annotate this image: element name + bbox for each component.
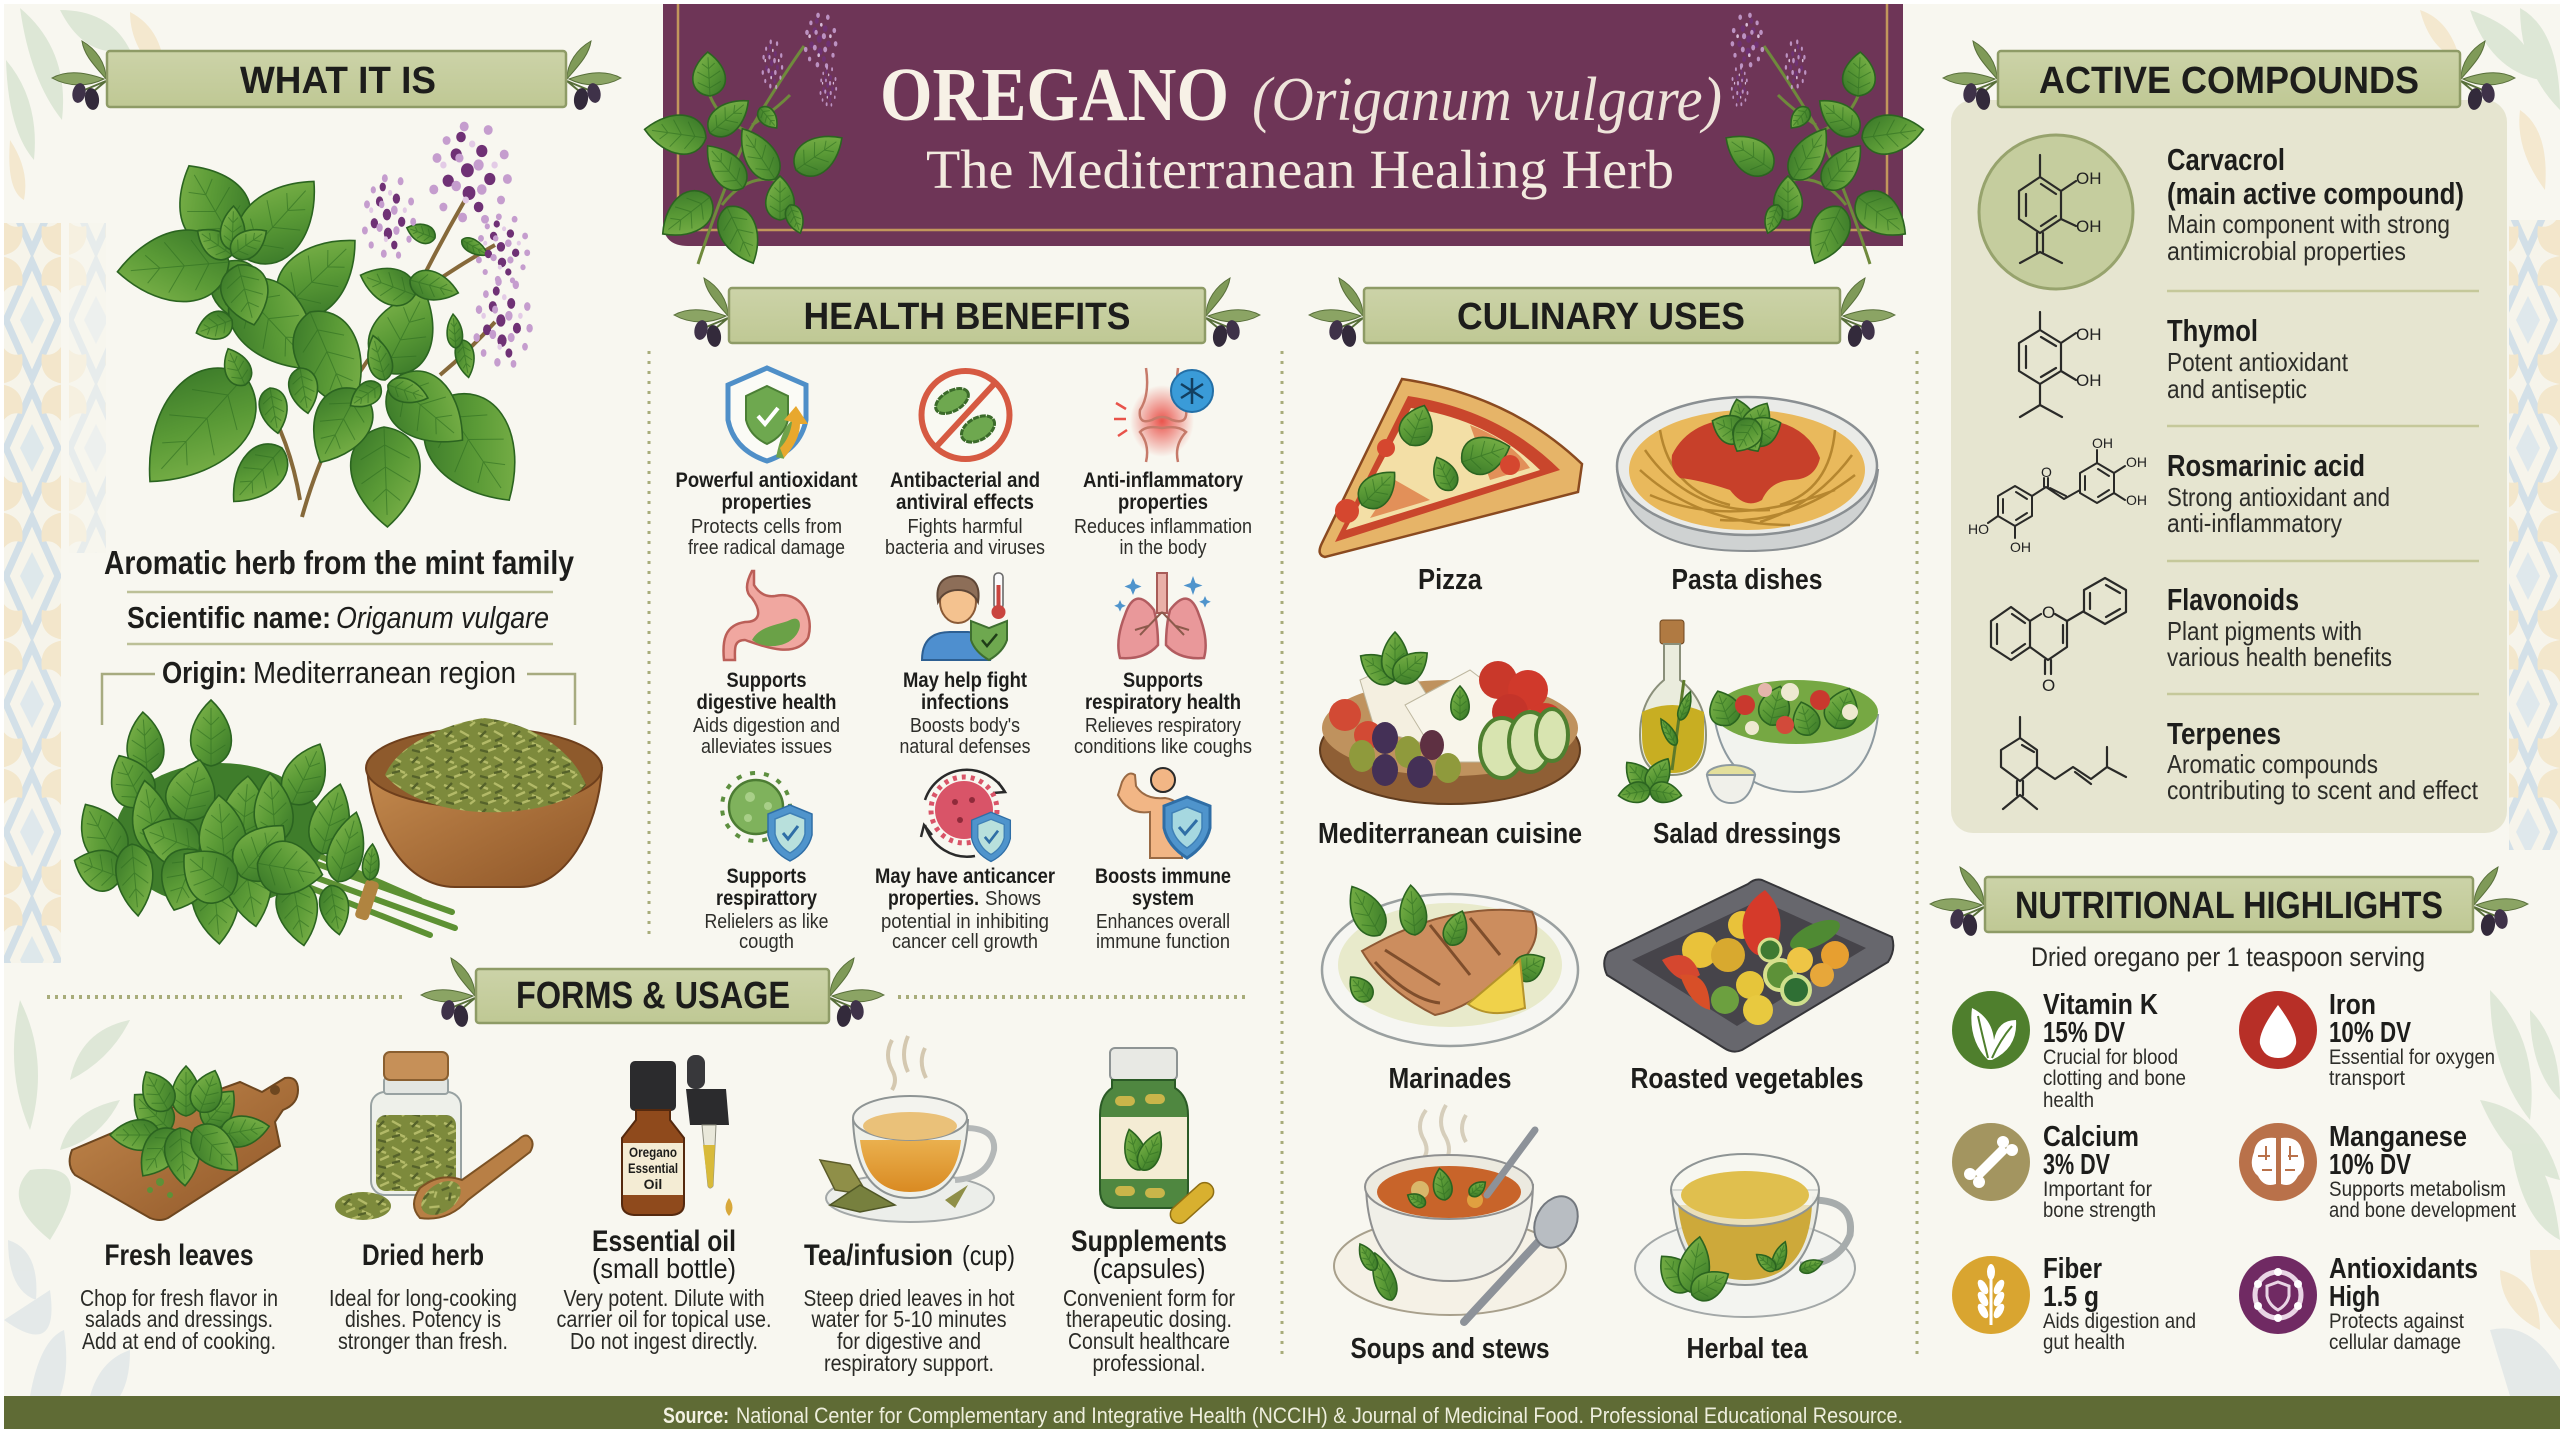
form: dried herb: Dried herb (362, 1239, 484, 1272)
benefit: supports respiratory: respirattory (716, 887, 817, 910)
benefit: anticancer (875, 770, 1055, 953)
molecule: rosmarinic acid: O (2041, 464, 2052, 480)
form: essential oil: carrier oil for topical use. (556, 1306, 772, 1332)
heading banner: forms and usage (421, 958, 884, 1028)
heading banner: health benefits (674, 278, 1260, 348)
illustration: fresh oregano bunch (67, 700, 455, 949)
form: essential oil (556, 1055, 772, 1354)
nutrient: iron (2239, 989, 2495, 1090)
benefit: respiratory health: respiratory health (1085, 691, 1241, 714)
illustration: pizza (1320, 379, 1582, 557)
molecule: carvacrol: OH (2076, 169, 2102, 188)
compound: flavonoids (1991, 578, 2392, 695)
benefit: digestive: Supports (726, 669, 806, 692)
illustration: oregano plant (114, 122, 544, 528)
molecule: rosmarinic acid (1968, 435, 2147, 555)
benefit: antioxidant: free radical damage (688, 537, 845, 559)
molecule: rosmarinic acid: OH (2126, 492, 2147, 508)
nutrient: antioxidants (2239, 1253, 2478, 1354)
background: right tile and foliage decoration (2420, 8, 2560, 1396)
nutrient: iron: transport (2329, 1067, 2405, 1090)
icon: cancer cell with shield (921, 770, 1010, 862)
benefit: anticancer: potential in inhibiting (881, 911, 1049, 933)
form: tea infusion: (cup) (962, 1240, 1015, 1271)
label: soups and stews: Soups and stews (1350, 1333, 1550, 1365)
heading banner: nutritional highlights (1930, 867, 2528, 937)
icon: brain (2239, 1123, 2317, 1201)
illustration: oil bottle and salad (1617, 620, 1878, 806)
icon: virus with shield (722, 773, 812, 861)
form: fresh leaves (70, 1064, 298, 1354)
benefit: anti-inflammatory: Anti-inflammatory (1083, 469, 1243, 492)
form: essential oil: Essential oil (592, 1225, 736, 1258)
form: fresh leaves: Add at end of cooking. (82, 1328, 276, 1354)
benefit: infections: Boosts body's (910, 715, 1020, 737)
icon: strong figure with shield (1118, 768, 1210, 858)
benefit: antibacterial: Fights harmful (908, 516, 1022, 538)
nutrient: vitamin K: Crucial for blood (2043, 1046, 2178, 1069)
nutrient: vitamin K: clotting and bone (2043, 1067, 2186, 1090)
benefit: anti-inflammatory (1074, 368, 1252, 559)
text: scientific name: Scientific name: (127, 600, 331, 635)
compound: carvacrol: (main active compound) (2167, 176, 2464, 211)
form: dried herb (329, 1052, 533, 1354)
nutrient: antioxidants: Protects against (2329, 1310, 2464, 1333)
nutrient: fiber (1952, 1253, 2196, 1354)
molecule: rosmarinic acid: HO (1968, 521, 1989, 537)
form: supplements: Consult healthcare (1068, 1328, 1230, 1354)
molecule: thymol: OH (2076, 371, 2102, 390)
panel background (1951, 100, 2507, 833)
benefit: anti-inflammatory: in the body (1120, 537, 1206, 559)
text: origin (102, 655, 575, 725)
icon: no bacteria (922, 371, 1010, 459)
heading banner: culinary uses: CULINARY USES (1457, 296, 1745, 338)
compound: thymol: Potent antioxidant (2167, 347, 2349, 377)
compound: carvacrol: Carvacrol (2167, 142, 2285, 177)
icon: blood drop (2239, 991, 2317, 1069)
benefit: anticancer: May have anticancer (875, 865, 1055, 888)
text: serving note: Dried oregano per 1 teaspoon serving (2031, 942, 2425, 972)
molecule: flavonoid: O (2042, 603, 2055, 622)
form: essential oil: Do not ingest directly. (570, 1328, 758, 1354)
nutrient: manganese: 10% DV (2329, 1149, 2412, 1181)
section: forms and usage (47, 958, 1249, 1376)
molecule: carvacrol: OH (2076, 217, 2102, 236)
benefit: antioxidant: Protects cells from (691, 516, 842, 538)
icon: stomach (723, 571, 810, 660)
illustration: oil bottle and dropper: Oregano (629, 1144, 677, 1160)
icon: sick person (922, 573, 1007, 660)
form: tea infusion (804, 1036, 1015, 1376)
text: origin: Origin: (162, 655, 247, 690)
nutrient: vitamin K: Vitamin K (2043, 989, 2158, 1021)
icon: wheat (1952, 1256, 2030, 1334)
compound: flavonoids: Flavonoids (2167, 582, 2299, 617)
form: fresh leaves: Fresh leaves (104, 1239, 254, 1272)
compound: flavonoids: Plant pigments with (2167, 616, 2362, 646)
compound: thymol: Thymol (2167, 313, 2258, 348)
compound: thymol: and antiseptic (2167, 374, 2307, 404)
text: origin: Mediterranean region (253, 655, 516, 690)
heading banner: what it is (52, 41, 621, 111)
form: tea infusion: Tea/infusion (804, 1239, 953, 1272)
nutrient: calcium: Important for (2043, 1178, 2152, 1201)
icon: bone (1952, 1123, 2030, 1201)
section: active compounds (1943, 41, 2515, 833)
benefit: digestive: Aids digestion and (693, 715, 840, 737)
illustration: marinated fish plate (1322, 879, 1578, 1046)
nutrient: manganese: and bone development (2329, 1199, 2516, 1222)
footer: source bar: National Center for Complementary and Integrative Health (NCCIH) & Journal of Medicinal Food. Professional Educational Resource. (736, 1403, 1903, 1428)
nutrient: antioxidants: Antioxidants (2329, 1253, 2478, 1285)
illustration: cutting board with leaves (70, 1064, 298, 1220)
nutrient: calcium: 3% DV (2043, 1149, 2110, 1181)
benefit: antioxidant: Powerful antioxidant (676, 469, 858, 492)
illustration: roasted vegetables tray (1604, 880, 1893, 1052)
compound: terpenes (2001, 716, 2479, 809)
footer: source bar (4, 1396, 2560, 1429)
label: salad dressings: Salad dressings (1653, 818, 1841, 850)
heading banner: forms and usage: FORMS & USAGE (516, 975, 790, 1017)
label: marinades: Marinades (1388, 1063, 1512, 1095)
form: supplements (1063, 1048, 1235, 1376)
benefit: immune: Boosts immune (1095, 865, 1231, 888)
benefit: infections: infections (921, 691, 1009, 714)
heading banner: nutritional highlights: NUTRITIONAL HIGHLIGHTS (2015, 885, 2443, 927)
heading banner: health benefits: HEALTH BENEFITS (804, 296, 1130, 338)
form: essential oil: (small bottle) (592, 1253, 736, 1284)
label: roasted vegetables: Roasted vegetables (1630, 1063, 1864, 1095)
label: mediterranean cuisine: Mediterranean cuisine (1318, 818, 1582, 850)
form: dried herb: dishes. Potency is (345, 1306, 501, 1332)
molecule: flavonoid: O (2042, 676, 2055, 695)
form: supplements: Supplements (1071, 1225, 1227, 1258)
nutrient: manganese (2239, 1121, 2516, 1222)
nutrient: calcium: Calcium (2043, 1121, 2139, 1153)
nutrient: iron: Iron (2329, 989, 2376, 1021)
nutrient: manganese: Manganese (2329, 1121, 2467, 1153)
title: Oregano: OREGANO (880, 53, 1229, 137)
benefit: immune: immune function (1096, 931, 1230, 953)
heading banner: culinary uses (1309, 278, 1895, 348)
benefit: respiratory health (1074, 573, 1252, 758)
nutrient: antioxidants: cellular damage (2329, 1331, 2461, 1354)
icon: lungs (1114, 573, 1211, 658)
molecule: thymol (2019, 312, 2102, 417)
form: supplements: professional. (1092, 1350, 1206, 1376)
illustration: dried oregano in wooden bowl (366, 718, 602, 887)
compound: rosmarinic acid: Rosmarinic acid (2167, 448, 2365, 483)
nutrient: fiber: Aids digestion and (2043, 1310, 2196, 1333)
compound: terpenes: contributing to scent and effect (2167, 775, 2479, 805)
compound: thymol (2019, 312, 2349, 417)
benefit: supports respiratory: Supports (726, 865, 806, 888)
form: tea infusion: for digestive and (837, 1328, 981, 1354)
form: supplements: Convenient form for (1063, 1285, 1235, 1311)
illustration: oil bottle and dropper: Essential (628, 1160, 678, 1176)
title: scientific name: (Origanum vulgare) (1252, 66, 1722, 134)
benefit: antioxidant: properties (722, 491, 812, 514)
illustration: jar and spoon (335, 1052, 533, 1222)
nutrient: fiber: 1.5 g (2043, 1281, 2099, 1313)
nutrient: calcium: bone strength (2043, 1199, 2156, 1222)
label: herbal tea: Herbal tea (1686, 1333, 1808, 1365)
nutrient: calcium (1952, 1121, 2156, 1222)
benefit: anti-inflammatory: Reduces inflammation (1074, 516, 1252, 538)
nutrient: antioxidants: High (2329, 1281, 2380, 1313)
illustration: oil bottle and dropper: Oil (644, 1176, 662, 1192)
molecule: thymol: OH (2076, 325, 2102, 344)
form: tea infusion: respiratory support. (824, 1350, 994, 1376)
nutrient: fiber: gut health (2043, 1331, 2125, 1354)
benefit: infections: May help fight (903, 669, 1027, 692)
nutrient: iron: 10% DV (2329, 1017, 2412, 1049)
section: culinary uses (1282, 278, 1917, 1365)
molecule: carvacrol (1979, 135, 2133, 289)
subtitle: The Mediterranean Healing Herb (926, 139, 1674, 200)
text: scientific name: Origanum vulgare (336, 600, 549, 635)
benefit: immune (1095, 768, 1231, 953)
benefit: respiratory health: Supports (1123, 669, 1203, 692)
heading banner: active compounds (1943, 41, 2515, 111)
compound: rosmarinic acid (1968, 435, 2390, 555)
benefit: infections (900, 573, 1030, 758)
illustration: herbal tea (1635, 1154, 1855, 1317)
illustration: mediterranean platter (1320, 632, 1580, 804)
form: fresh leaves: Chop for fresh flavor in (80, 1285, 278, 1311)
benefit: immune: Enhances overall (1096, 911, 1230, 933)
nutrient: iron: Essential for oxygen (2329, 1046, 2495, 1069)
nutrient: vitamin K: health (2043, 1089, 2094, 1112)
icon: leaf (1952, 991, 2030, 1069)
icon: shield ring (2239, 1256, 2317, 1334)
label: pizza: Pizza (1418, 564, 1483, 596)
compound: rosmarinic acid: anti-inflammatory (2167, 508, 2342, 538)
compound: carvacrol (1979, 135, 2464, 289)
nutrient: manganese: Supports metabolism (2329, 1178, 2506, 1201)
compound: terpenes: Aromatic compounds (2167, 749, 2378, 779)
benefit: antibacterial: Antibacterial and (890, 469, 1040, 492)
benefit: digestive: alleviates issues (701, 736, 832, 758)
benefit: anticancer: Shows (985, 888, 1041, 910)
heading banner: active compounds: ACTIVE COMPOUNDS (2039, 60, 2419, 102)
text: scientific name (127, 600, 549, 635)
heading banner: what it is: WHAT IT IS (240, 60, 436, 102)
compound: carvacrol: antimicrobial properties (2167, 236, 2406, 266)
benefit: supports respiratory: Relielers as like (704, 911, 828, 933)
benefit: digestive (693, 571, 840, 758)
icon: right oregano sprig on banner (1716, 13, 1926, 271)
compound: flavonoids: various health benefits (2167, 642, 2392, 672)
title banner (663, 4, 1903, 246)
footer: source bar: Source: (663, 1403, 729, 1428)
molecule: flavonoid (1991, 578, 2126, 695)
icon: left oregano sprig on banner (642, 13, 852, 271)
nutrient: vitamin K: 15% DV (2043, 1017, 2126, 1049)
illustration: soup bowl (1334, 1105, 1586, 1322)
section: what it is (52, 41, 621, 949)
illustration: supplement bottle (1100, 1048, 1217, 1227)
benefit: digestive: digestive health (696, 691, 836, 714)
form: supplements: therapeutic dosing. (1066, 1306, 1232, 1332)
molecule: rosmarinic acid: OH (2092, 435, 2113, 451)
nutrient: vitamin K (1952, 989, 2186, 1112)
benefit: anti-inflammatory: properties (1118, 491, 1208, 514)
nutrient: fiber: Fiber (2043, 1253, 2102, 1285)
benefit: infections: natural defenses (900, 736, 1030, 758)
compound: carvacrol: Main component with strong (2167, 209, 2450, 239)
section: health benefits (649, 278, 1260, 953)
benefit: immune: system (1132, 887, 1194, 910)
section: nutritional highlights (1930, 867, 2528, 1354)
label: pasta dishes: Pasta dishes (1672, 564, 1822, 596)
form: dried herb: Ideal for long-cooking (329, 1285, 517, 1311)
benefit: antioxidant (676, 368, 858, 559)
benefit: respiratory health: conditions like coughs (1074, 736, 1252, 758)
icon: joint (1114, 368, 1213, 462)
benefit: anticancer: cancer cell growth (892, 931, 1038, 953)
benefit: respiratory health: Relieves respiratory (1085, 715, 1241, 737)
molecule: rosmarinic acid: OH (2126, 454, 2147, 470)
molecule: terpene (2001, 717, 2126, 809)
benefit: supports respiratory (704, 773, 828, 953)
text: aromatic herb: Aromatic herb from the mint family (104, 544, 575, 581)
illustration: pasta bowl (1617, 396, 1878, 551)
illustration: oil bottle and dropper (622, 1055, 732, 1216)
icon: shield (728, 368, 808, 461)
form: dried herb: stronger than fresh. (338, 1328, 508, 1354)
molecule: rosmarinic acid: OH (2010, 539, 2031, 555)
form: fresh leaves: salads and dressings. (85, 1306, 273, 1332)
benefit: supports respiratory: cougth (739, 931, 794, 953)
compound: terpenes: Terpenes (2167, 716, 2281, 751)
benefit: anticancer: properties. (888, 887, 979, 910)
form: tea infusion: water for 5-10 minutes (811, 1306, 1006, 1332)
benefit: antibacterial (885, 371, 1045, 559)
background: left tile and foliage decoration (4, 8, 165, 1396)
illustration: tea cup (820, 1036, 994, 1222)
form: supplements: (capsules) (1092, 1253, 1206, 1284)
form: essential oil: Very potent. Dilute with (564, 1285, 764, 1311)
form: tea infusion: Steep dried leaves in hot (804, 1285, 1015, 1311)
compound: rosmarinic acid: Strong antioxidant and (2167, 482, 2390, 512)
benefit: antibacterial: antiviral effects (896, 491, 1034, 514)
benefit: antibacterial: bacteria and viruses (885, 537, 1045, 559)
